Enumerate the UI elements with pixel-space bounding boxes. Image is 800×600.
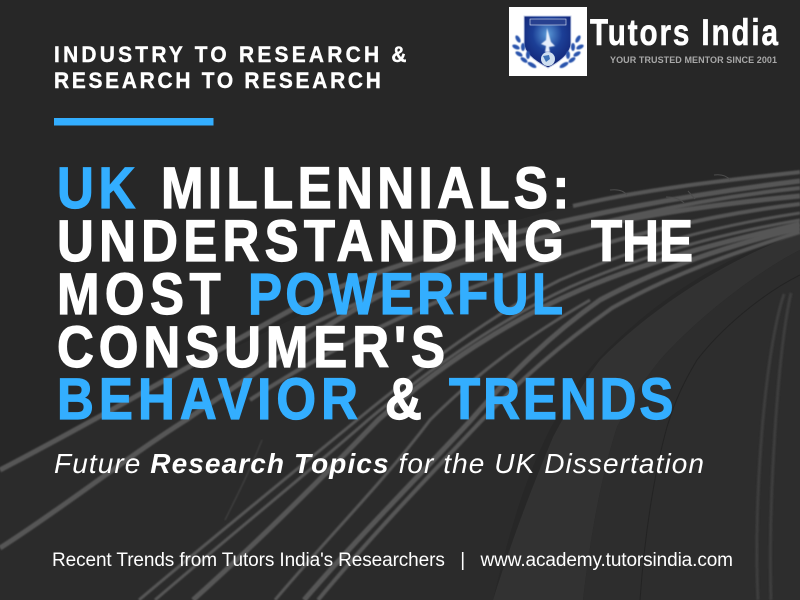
- main title: THE: [591, 209, 693, 274]
- main title: UNDERSTANDING: [57, 209, 564, 274]
- logo: Tutors India: [509, 7, 778, 76]
- kicker heading: RESEARCH TO RESEARCH: [54, 69, 381, 93]
- concrete wall band: [493, 233, 800, 600]
- right-hand lower road: [583, 250, 800, 600]
- road surface band: [0, 172, 800, 600]
- kicker heading: INDUSTRY TO RESEARCH &: [54, 43, 406, 67]
- footer line: Recent Trends from Tutors India's Researchers | www.academy.tutorsindia.com: [52, 550, 733, 571]
- logo tagline: YOUR TRUSTED MENTOR SINCE 2001: [610, 55, 777, 65]
- main title: TRENDS: [449, 367, 673, 432]
- main title: CONSUMER'S: [57, 315, 445, 380]
- subtitle: Future Research Topics for the UK Dissertation: [54, 448, 704, 479]
- main title: &: [385, 367, 422, 432]
- main title: [57, 156, 693, 432]
- main title: MILLENNIALS:: [161, 156, 569, 221]
- accent bar: [54, 118, 214, 126]
- main title: BEHAVIOR: [57, 367, 358, 432]
- logo wordmark: Tutors India: [590, 13, 778, 54]
- light trails: [0, 172, 800, 600]
- kicker heading: [54, 43, 406, 93]
- main title: UK: [57, 156, 135, 221]
- road edge line: [640, 275, 800, 600]
- main title: MOST: [57, 262, 221, 327]
- logo badge: [509, 7, 587, 76]
- lamp posts: [610, 175, 730, 203]
- lower road lane lines: [757, 293, 791, 600]
- main title: POWERFUL: [248, 262, 563, 327]
